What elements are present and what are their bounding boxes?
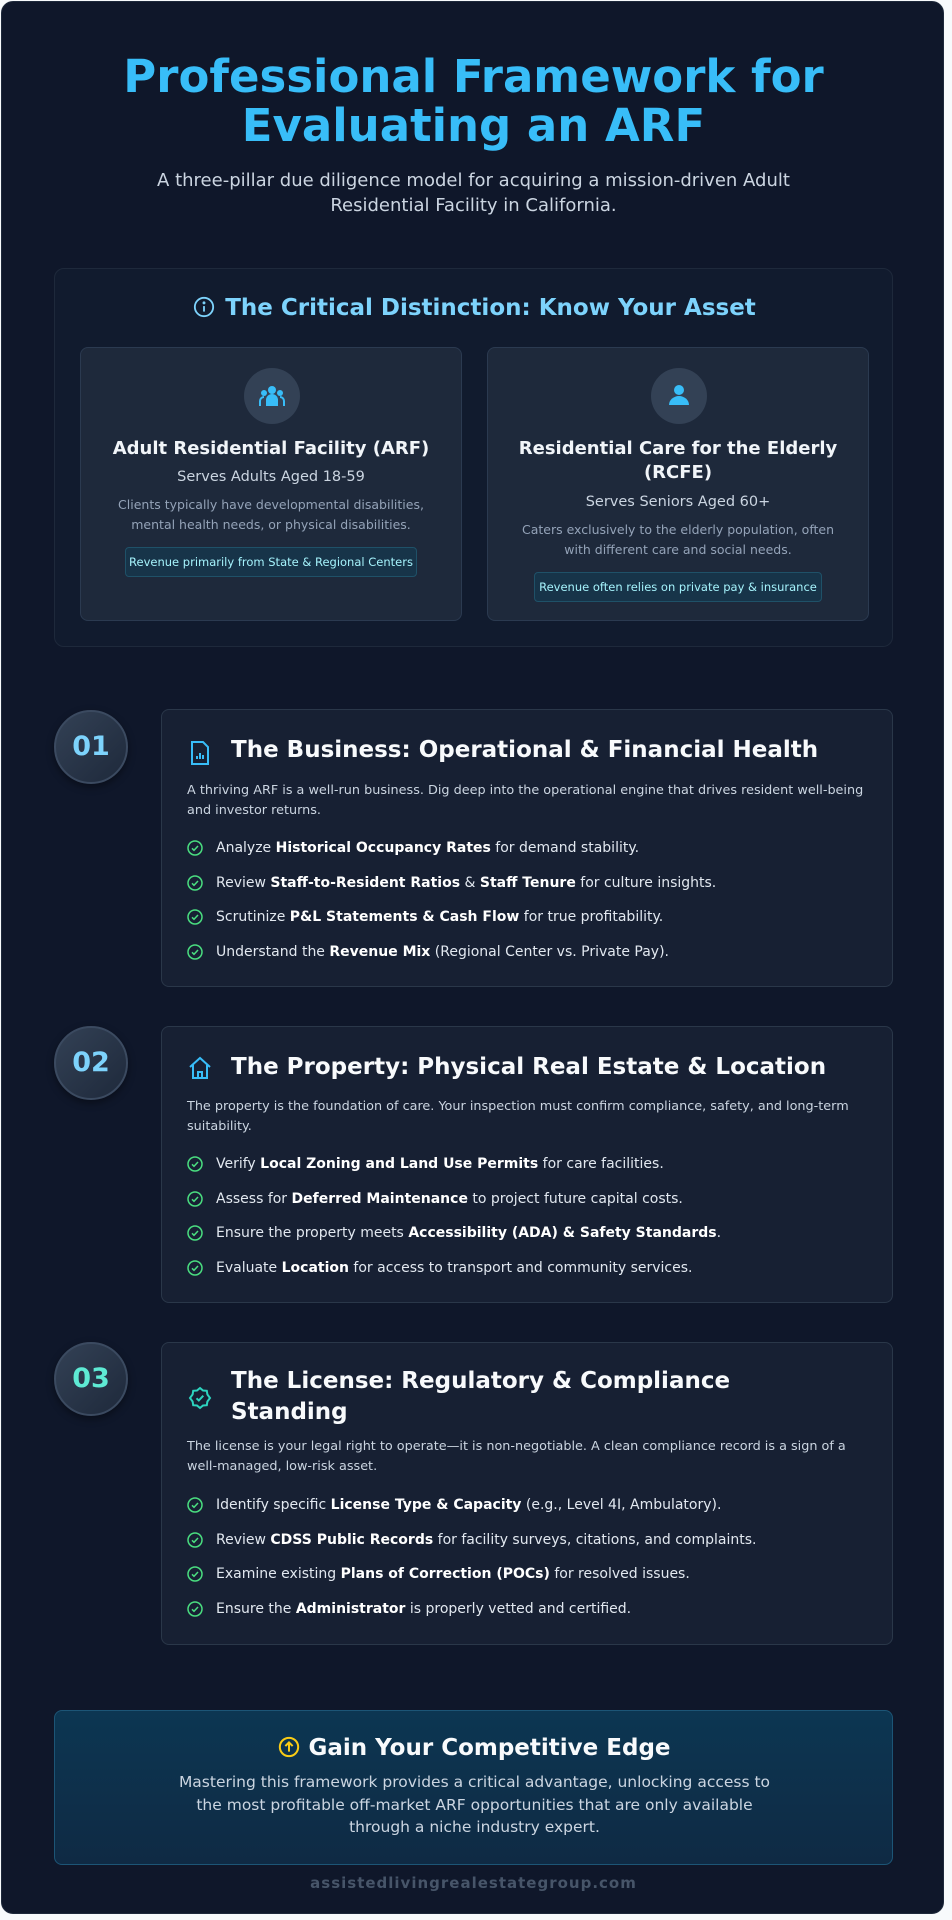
checklist: Verify Local Zoning and Land Use Permits for care facilities.: [216, 1156, 664, 1172]
icon: badge check: [188, 1386, 212, 1410]
callout heading: Gain Your Competitive Edge: [308, 1735, 671, 1761]
number badge 02: [54, 1026, 128, 1100]
panel: the business: [161, 709, 893, 987]
badge: [125, 547, 417, 577]
checklist: Review CDSS Public Records for facility surveys, citations, and complaints.: [216, 1532, 756, 1548]
panel: critical distinction: [54, 268, 893, 647]
icon: report: [191, 741, 209, 765]
title: Evaluating an ARF: [242, 99, 705, 152]
heading: The Property: Physical Real Estate & Location: [231, 1054, 826, 1080]
checklist: Identify specific License Type & Capacity (e.g., Level 4I, Ambulatory).: [216, 1497, 721, 1513]
card subtitle: Serves Adults Aged 18-59: [177, 469, 365, 485]
checklist: [187, 1156, 721, 1276]
title: [123, 50, 824, 152]
checklist: Ensure the property meets Accessibility (ADA) & Safety Standards.: [216, 1225, 721, 1241]
number badge 03: 03: [72, 1363, 110, 1394]
footer: assistedlivingrealestategroup.com: [310, 1874, 637, 1892]
number badge 02: 02: [72, 1047, 110, 1078]
title: Professional Framework for: [123, 50, 824, 103]
number badge 01: 01: [72, 731, 110, 762]
icon: house: [189, 1056, 211, 1079]
description: The license is your legal right to operate—it is non-negotiable. A clean compliance record is a sign of a well-managed, low-risk asset.: [187, 1439, 846, 1474]
number badge 03: [54, 1342, 128, 1416]
panel: the license: [161, 1342, 893, 1645]
description: A thriving ARF is a well-run business. Dig deep into the operational engine that drives resident well-being and investor returns.: [187, 783, 863, 818]
card description: Caters exclusively to the elderly population, often with different care and social needs.: [522, 522, 834, 556]
checklist: [187, 1497, 756, 1617]
callout: competitive edge: [54, 1710, 893, 1865]
badge: [534, 572, 822, 602]
card: RCFE: [487, 347, 869, 621]
checklist: Review Staff-to-Resident Ratios & Staff Tenure for culture insights.: [216, 874, 716, 890]
checklist: [187, 840, 716, 960]
callout text: Mastering this framework provides a critical advantage, unlocking access to the most profitable off-market ARF opportunities that are only available through a niche industry expert.: [179, 1773, 770, 1836]
subtitle: A three-pillar due diligence model for acquiring a mission-driven Adult Residential Facility in California.: [157, 170, 790, 216]
badge: Revenue primarily from State & Regional Centers: [129, 555, 413, 569]
checklist: Scrutinize P&L Statements & Cash Flow for true profitability.: [216, 909, 663, 925]
card title: Adult Residential Facility (ARF): [113, 438, 429, 459]
card title: Residential Care for the Elderly (RCFE): [519, 438, 837, 483]
number badge 01: [54, 710, 128, 784]
panel: the property: [161, 1026, 893, 1303]
checklist: Assess for Deferred Maintenance to project future capital costs.: [216, 1190, 683, 1206]
checklist: Ensure the Administrator is properly vetted and certified.: [216, 1600, 631, 1616]
checklist: Evaluate Location for access to transport and community services.: [216, 1260, 692, 1276]
heading: The Business: Operational & Financial Health: [231, 737, 818, 763]
checklist: Examine existing Plans of Correction (POCs) for resolved issues.: [216, 1566, 690, 1582]
card subtitle: Serves Seniors Aged 60+: [586, 494, 770, 510]
icon: person: [651, 368, 707, 424]
checklist: Understand the Revenue Mix (Regional Center vs. Private Pay).: [216, 944, 669, 960]
checklist: Analyze Historical Occupancy Rates for demand stability.: [216, 840, 639, 856]
heading: critical distinction: The Critical Distinction: Know Your Asset: [225, 295, 756, 321]
card description: Clients typically have developmental disabilities, mental health needs, or physical disabilities.: [118, 497, 424, 532]
badge: Revenue often relies on private pay & insurance: [539, 580, 817, 594]
icon: group: [244, 368, 300, 424]
card: ARF: [80, 347, 462, 621]
description: The property is the foundation of care. Your inspection must confirm compliance, safety, and long-term suitability.: [187, 1099, 849, 1134]
heading: The License: Regulatory & Compliance Standing: [231, 1368, 730, 1425]
